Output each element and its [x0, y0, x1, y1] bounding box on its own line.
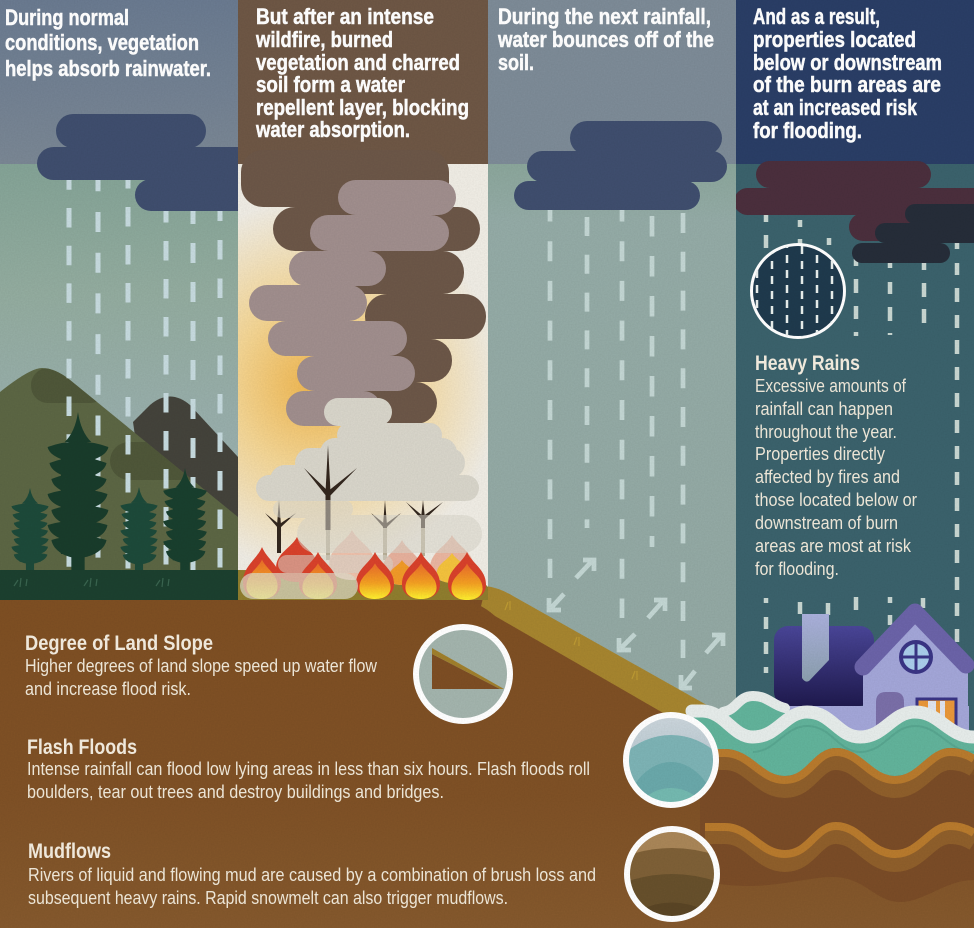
icon: door: [876, 692, 904, 735]
icon: bounce arrows: [549, 560, 723, 688]
icon: lit window: [917, 699, 956, 731]
icon: burned trees: [265, 445, 443, 560]
text: flash floods: boulders, tear out trees and destroy buildings and bridges.: [27, 781, 444, 802]
text: degree of land slope: [25, 632, 382, 699]
text: heavy rains: affected by fires and: [755, 466, 900, 487]
soil layer: upper band: [700, 752, 974, 790]
rain: heavy rain streaks: [766, 215, 957, 673]
text: mudflows: Rivers of liquid and flowing mud are caused by a combination of brush loss and: [28, 864, 596, 885]
text: heavy rains: Heavy Rains: [755, 352, 860, 375]
smoke: translucent low drift: [273, 500, 482, 573]
text: after wildfire heading: vegetation and charred: [256, 50, 460, 75]
clouds: storm clouds: [734, 161, 974, 263]
text: heavy rains: for flooding.: [755, 558, 839, 579]
text: flash floods: Flash Floods: [27, 736, 137, 759]
text: flash floods: [27, 736, 595, 802]
text: normal conditions heading: During normal: [5, 5, 129, 30]
text: normal conditions heading: helps absorb rainwater.: [5, 56, 211, 81]
ground: brown soil with layers: [0, 600, 974, 928]
icon: land slope circle: [416, 627, 510, 721]
text: heavy rains: areas are most at risk: [755, 535, 912, 556]
text: heavy rains: Excessive amounts of: [755, 375, 907, 396]
text: heavy rains: [755, 352, 922, 579]
text: heavy rains: Properties directly: [755, 443, 886, 464]
text: next rainfall heading: soil.: [498, 50, 534, 75]
rain: bouncing off soil: [550, 202, 683, 658]
smoke: foreground bank: [240, 573, 358, 599]
icon: flash floods circle: [623, 712, 719, 808]
panel: after wildfire: [238, 0, 488, 600]
text: flash floods: Intense rainfall can flood low lying areas in less than six hours. Flash floods roll: [27, 758, 590, 779]
text: result heading: And as a result,: [753, 4, 880, 29]
text: result heading: properties located: [753, 27, 916, 52]
text: after wildfire heading: But after an intense: [256, 4, 434, 29]
icon: mountains: [0, 368, 238, 570]
rain: normal conditions: [69, 169, 220, 570]
soil layer: lower band: [705, 826, 974, 864]
text: degree of land slope: Higher degrees of land slope speed up water flow: [25, 655, 378, 676]
ground: forest floor: [0, 570, 238, 600]
icon: evergreen trees: [11, 412, 207, 571]
text: result heading: for flooding.: [753, 118, 862, 143]
text: heavy rains: throughout the year.: [755, 421, 897, 442]
text: heavy rains: downstream of burn: [755, 512, 898, 533]
text: after wildfire heading: repellent layer, blocking: [256, 95, 469, 120]
text: degree of land slope: Degree of Land Slope: [25, 632, 213, 655]
text: mudflows: [28, 840, 601, 908]
text: after wildfire heading: soil form a water: [256, 72, 405, 97]
panel: next rainfall: [488, 0, 736, 724]
icon: house: [774, 612, 969, 736]
icon: round window: [901, 642, 931, 672]
text: after wildfire heading: wildfire, burned: [255, 27, 393, 52]
water: flood waves: [692, 696, 974, 790]
text: degree of land slope: and increase flood risk.: [25, 678, 191, 699]
panel: increased flood risk: [734, 0, 974, 744]
text: mudflows: Mudflows: [28, 840, 111, 863]
icon: heavy rains circle: [752, 240, 844, 340]
clouds: next rainfall: [514, 121, 727, 210]
ground: scorched hill: [238, 570, 488, 600]
text: heavy rains: rainfall can happen: [755, 398, 893, 419]
smoke plume: [241, 150, 486, 501]
text: heavy rains: those located below or: [755, 489, 917, 510]
panel: normal conditions: [0, 0, 238, 600]
icon: rear flames: [276, 530, 474, 585]
icon: front flames: [243, 547, 486, 600]
clouds: normal conditions: [37, 114, 238, 211]
icon: mudflows circle: [620, 828, 724, 922]
ground: olive slope: [480, 586, 712, 730]
text: next rainfall heading: water bounces off of the: [497, 27, 714, 52]
text: next rainfall heading: During the next rainfall,: [498, 4, 711, 29]
text: result heading: at an increased risk: [753, 95, 917, 120]
text: result heading: of the burn areas are: [753, 72, 941, 97]
text: normal conditions heading: conditions, vegetation: [5, 30, 199, 55]
text: mudflows: subsequent heavy rains. Rapid snowmelt can also trigger mudflows.: [28, 887, 508, 908]
text: after wildfire heading: water absorption.: [255, 117, 410, 142]
